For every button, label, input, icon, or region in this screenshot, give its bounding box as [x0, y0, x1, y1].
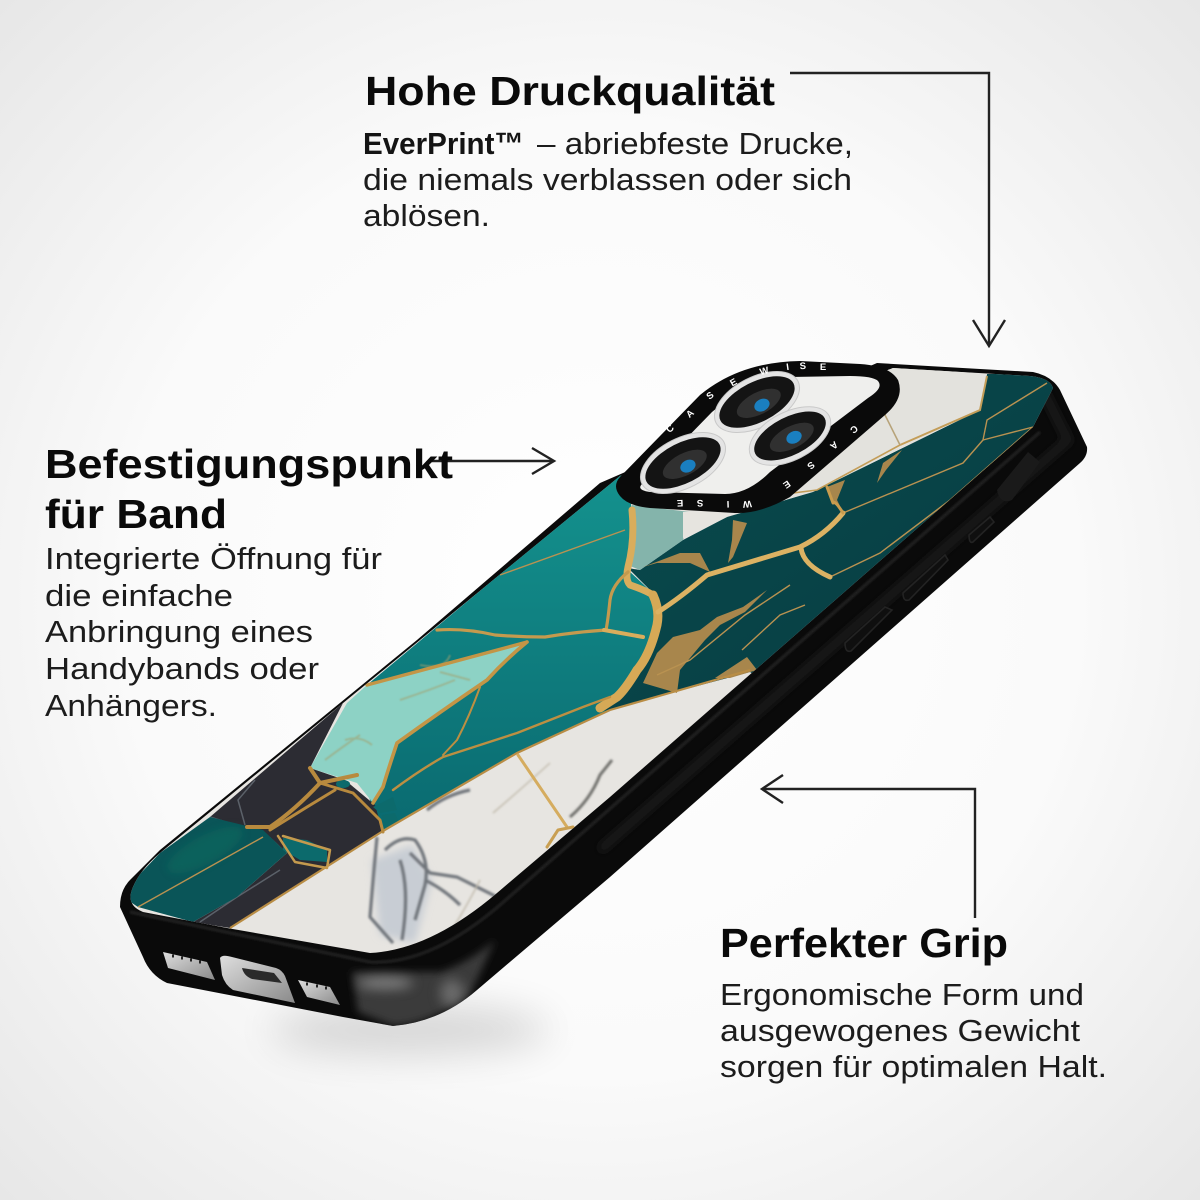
- body line 4: Handybands oder: [45, 651, 319, 686]
- ring lettering: S: [704, 390, 716, 402]
- ring lettering: E: [728, 376, 739, 389]
- lens: left: [631, 420, 735, 506]
- ring lettering: E: [677, 497, 683, 508]
- ring lettering: I: [727, 498, 730, 509]
- text block: strap attachment: [45, 441, 453, 723]
- pale section under camera: [630, 505, 690, 570]
- dark teal lower corner: [120, 817, 287, 922]
- body line 3: ablösen.: [363, 198, 490, 233]
- body line 5: Anhängers.: [45, 688, 217, 723]
- white marble: [130, 368, 1053, 953]
- side buttons: [845, 452, 1040, 651]
- camera module: [616, 359, 900, 513]
- heading line 2: für Band: [45, 491, 227, 537]
- body line 2: ausgewogenes Gewicht: [720, 1013, 1080, 1048]
- ring lettering: A: [827, 438, 840, 451]
- arrow: grip: [762, 775, 975, 918]
- body line 1: – abriebfeste Drucke,: [537, 126, 853, 161]
- emerald section: [600, 372, 1060, 712]
- turquoise marble: [310, 642, 527, 803]
- bottom ports: [163, 952, 340, 1005]
- marble veins: [370, 760, 612, 943]
- gold dust: [643, 450, 902, 693]
- side edge highlights: [130, 385, 1068, 1026]
- body line 1: Ergonomische Form und: [720, 977, 1084, 1012]
- body line 1: Integrierte Öffnung für: [45, 541, 382, 576]
- ring lettering: S: [697, 497, 703, 508]
- heading: Hohe Druckqualität: [365, 68, 775, 114]
- arrow: top callout to case edge: [790, 73, 1005, 346]
- heading line 1: Befestigungspunkt: [45, 441, 453, 487]
- ring lettering: E: [820, 362, 826, 373]
- arrow: strap attachment: [430, 448, 554, 474]
- camera plate: [640, 376, 880, 494]
- ring lettering: A: [684, 408, 697, 421]
- body line 2: die niemals verblassen oder sich: [363, 162, 852, 197]
- ring lettering: C: [664, 423, 677, 436]
- teal section: [369, 475, 654, 830]
- black stone: [193, 703, 383, 928]
- ring lettering: S: [805, 459, 817, 471]
- body line 3: Anbringung eines: [45, 614, 313, 649]
- small teal cells: [283, 780, 376, 862]
- lens: right: [740, 395, 840, 477]
- ring lettering: [664, 361, 860, 509]
- phone case: [100, 340, 1100, 1026]
- brand name: EverPrint™: [363, 126, 524, 161]
- white marble top right: [770, 366, 987, 505]
- ring lettering: C: [847, 422, 860, 435]
- ring lettering: W: [759, 365, 770, 378]
- ring lettering: I: [786, 362, 790, 373]
- body line 3: sorgen für optimalen Halt.: [720, 1049, 1107, 1084]
- text block: grip: [720, 920, 1107, 1084]
- ring lettering: S: [799, 361, 806, 372]
- main gold veins: [247, 487, 843, 868]
- printed back: [130, 368, 1053, 953]
- thin veins in emerald: [138, 376, 1047, 928]
- white marble under camera: [683, 512, 728, 538]
- ring lettering: E: [781, 478, 792, 490]
- heading: Perfekter Grip: [720, 920, 1008, 966]
- phone shadow: [270, 1006, 550, 1054]
- camera ring: [616, 361, 900, 513]
- text block: print quality: [363, 68, 853, 233]
- ring lettering: W: [742, 498, 752, 509]
- lens: top: [705, 359, 809, 445]
- case body: [120, 363, 1087, 1026]
- body line 2: die einfache: [45, 578, 233, 613]
